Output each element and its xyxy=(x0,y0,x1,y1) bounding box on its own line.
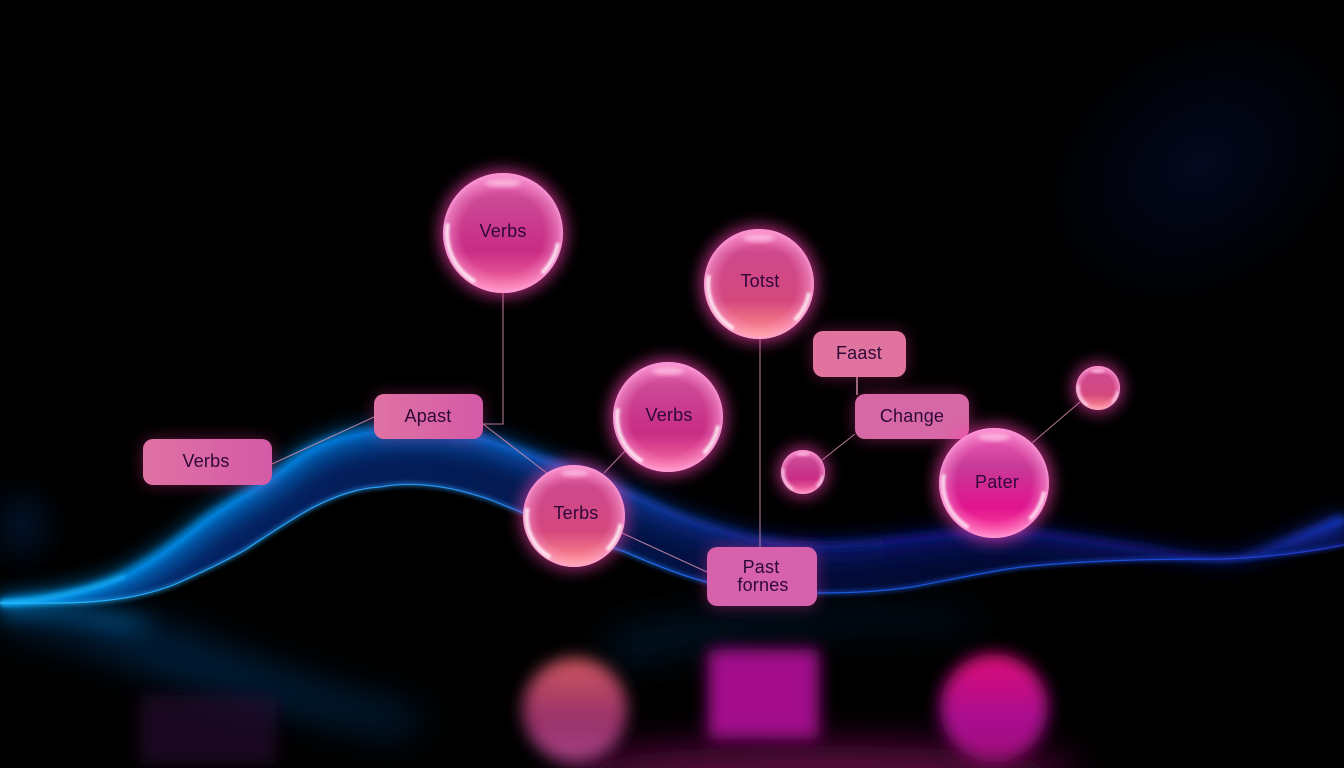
label: Apast xyxy=(374,394,483,439)
connector lines xyxy=(272,292,1080,572)
sphere: Terbs: Terbs xyxy=(553,503,599,523)
reflection: bottom pink glow xyxy=(560,746,1080,768)
label: Change xyxy=(855,394,969,439)
wave band body xyxy=(13,431,1344,602)
connector: Verbs sphere to Apast xyxy=(483,292,503,424)
band soft bright upper edge xyxy=(0,429,1344,603)
reflection: Terbs sphere xyxy=(523,658,627,762)
label: Faast xyxy=(813,331,906,377)
glowing blue wave xyxy=(0,420,1344,620)
connector: Change to small sphere xyxy=(822,434,855,460)
floor reflections xyxy=(0,605,1080,768)
label: Faast: Faast xyxy=(836,343,882,363)
background haze: blue top right xyxy=(986,0,1344,369)
sphere: small centre xyxy=(778,447,828,497)
wave outer glow xyxy=(0,429,1344,603)
connector: Faast to Change xyxy=(856,377,858,395)
sphere: Verbs (middle) xyxy=(610,359,726,475)
wave origin flare xyxy=(0,576,125,603)
reflection: blue wave xyxy=(0,606,430,735)
label: Verbs: Verbs xyxy=(182,451,230,471)
connector: Apast to Terbs xyxy=(483,424,548,474)
wave lower edge line xyxy=(0,484,1344,603)
sphere: Verbs (top) xyxy=(440,170,566,296)
background haze: blue left xyxy=(0,475,67,575)
reflection: Pater sphere xyxy=(940,654,1048,762)
label: Change: Change xyxy=(880,406,944,426)
connector: Verbs label to Apast xyxy=(272,417,374,464)
wave lower edge glow xyxy=(0,484,1344,603)
label: Past forms xyxy=(707,547,817,606)
connector: Terbs to Past forms xyxy=(622,533,707,572)
sphere: small right xyxy=(1073,363,1123,413)
sphere: Verbs (middle): Verbs xyxy=(645,405,693,425)
reflection: Past forms label xyxy=(708,649,819,739)
sphere: Verbs (top): Verbs xyxy=(479,221,527,241)
sphere: Terbs xyxy=(520,462,628,570)
sphere: Totst: Totst xyxy=(740,271,780,291)
connector: Totst to Past forms xyxy=(759,338,761,547)
reflection: blue wave centre xyxy=(600,610,980,665)
connector: Verbs sphere to Terbs xyxy=(604,451,625,473)
label: Verbs xyxy=(143,439,272,485)
label: Apast: Apast xyxy=(404,406,452,426)
reflection: bright wave start xyxy=(0,605,160,630)
label: Past forms: Past xyxy=(743,557,779,577)
reflection: faint label xyxy=(140,695,276,765)
band base fill xyxy=(80,436,1344,602)
sphere: Totst xyxy=(701,226,817,342)
label: Past forms: fornes xyxy=(737,575,789,595)
band wide glow from upper edge xyxy=(0,429,1344,603)
connector: Pater to small sphere xyxy=(1032,402,1080,443)
sphere: Pater: Pater xyxy=(975,472,1019,492)
sphere: Pater xyxy=(936,425,1052,541)
